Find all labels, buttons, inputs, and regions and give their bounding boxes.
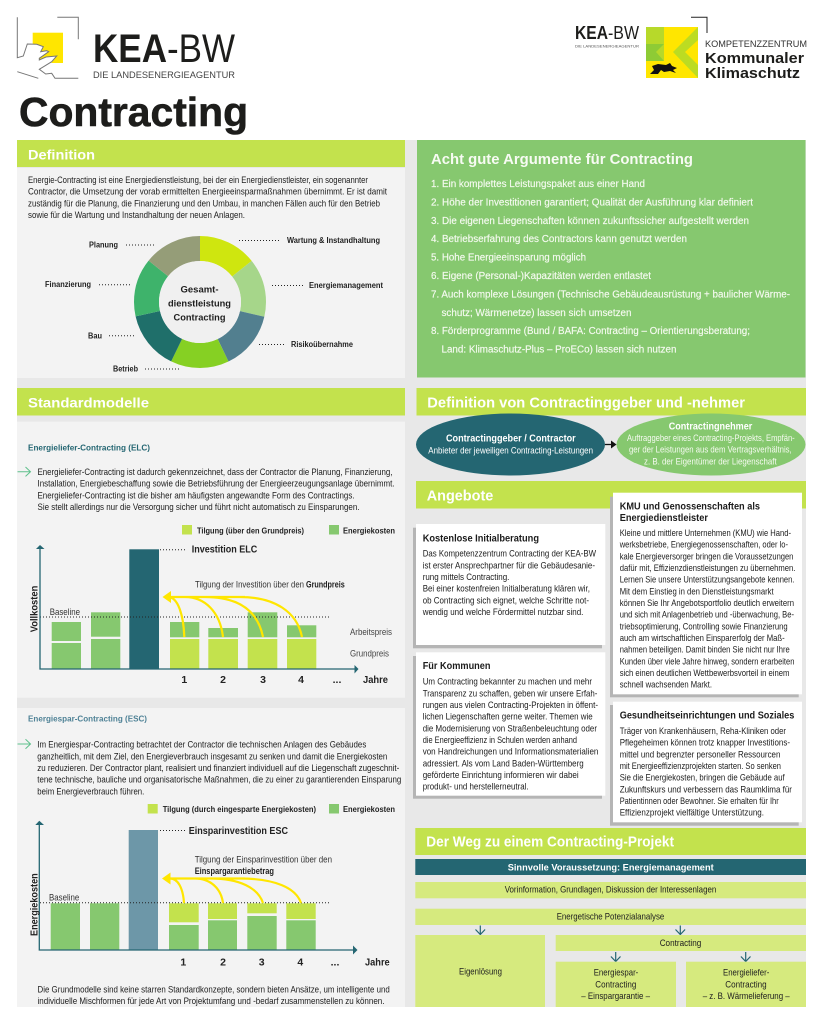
card: Gesundheitseinrichtungen und Soziales: Patientinnen oder Bewohner. Sie erhalten für Ihr: [620, 796, 779, 806]
panel: Acht gute Argumente: 1. Ein komplettes Leistungspaket aus einer Hand: [431, 179, 645, 190]
card: Für Kommunen: rungen aus vielen Contracting-Projekten in öffent-: [423, 700, 598, 710]
logo: KEA-BW: DIE LANDESENERGIEAGENTUR: [93, 70, 236, 80]
card: KMU und Genossenschaften: werksbetriebe, Energiegenossenschaften, oder lo-: [619, 540, 788, 550]
arrow: [605, 440, 616, 448]
chart: donut Gesamtdienstleistung: Wartung & Instandhaltung: [287, 235, 380, 245]
chart: ESC bars: 3: [259, 956, 265, 968]
step: Energieliefer-Contracting: Energieliefer-: [723, 968, 769, 978]
heading: Definition: Definition: [28, 146, 95, 162]
card: Gesundheitseinrichtungen und Soziales: Gesundheitseinrichtungen und Soziales: [620, 710, 795, 722]
card: KMU und Genossenschaften: dafür mit, Effizienzdienstleistungen zu übernehmen.: [620, 563, 795, 573]
heading: Definition von Contractinggeber und -nehmer: Definition von Contractinggeber und -nehmer: [427, 395, 745, 412]
card: KMU und Genossenschaften: nahmen beteiligen. Damit binden Sie nicht nur Ihre: [620, 645, 790, 655]
step: Vorinformation: Vorinformation, Grundlagen, Diskussion der Interessenlagen: [505, 885, 716, 895]
flow: Der Weg: [415, 859, 806, 1007]
card: KMU und Genossenschaften: Kleine und mittlere Unternehmen (KMU) wie Hand-: [620, 528, 791, 538]
chart: donut Gesamtdienstleistung: dienstleistung: [168, 298, 231, 310]
logo: KEA-BW: -BW: [167, 27, 235, 71]
panel: Acht gute Argumente: [417, 140, 806, 378]
card: Für Kommunen: Um Contracting bekannter zu machen und mehr: [423, 677, 592, 687]
card: KMU und Genossenschaften: Mit dem Einstieg in den Dienstleistungsmarkt: [620, 586, 774, 596]
arrows: down from Contracting: [611, 952, 750, 962]
card: Für Kommunen: produkt- und herstellerneutral.: [423, 782, 529, 792]
step: Energiespar-Contracting: Contracting: [595, 979, 636, 989]
legend: ELC: Tilgung (über den Grundpreis): [197, 526, 304, 536]
heading: Der Weg zu einem Contracting-Projekt: [415, 828, 806, 855]
text: ESC description: beim Energieverbrauch führen.: [37, 786, 144, 796]
panel: Acht gute Argumente: Land: Klimaschutz-Plus – ProECo) lassen sich nutzen: [442, 345, 676, 356]
card: KMU und Genossenschaften: schnell wachsenden Markt.: [620, 680, 712, 690]
step: Eigenlösung: [415, 935, 545, 1007]
panel: Acht gute Argumente: 4. Betriebserfahrung des Contractors kann genutzt werden: [431, 234, 687, 245]
text: ESC description: tene technische, bauliche und organisatorische Maßnahmen, die zu einer zu garantierenden Einsparung: [37, 775, 401, 785]
card: Für Kommunen: Für Kommunen: [423, 660, 490, 672]
step: Eigenlösung: Eigenlösung: [459, 966, 502, 976]
chart: donut Gesamtdienstleistung: Betrieb: [113, 364, 138, 374]
chart: ESC bars: Jahre: [365, 956, 390, 968]
step: Contracting: [556, 935, 806, 951]
arrows: down from Potenzialanalyse: [476, 926, 685, 934]
panel: Definition: [17, 140, 405, 378]
step: Sinnvolle Voraussetzung: [415, 859, 806, 875]
chart: ELC bars: Vollkosten: [28, 586, 40, 632]
text: definition paragraph: zuständig für die Planung, die Finanzierung und den Umbau, in manchen Fällen auch für den Betrieb: [28, 198, 380, 208]
card: Für Kommunen: von Handreichungen und Informationsmaterialien: [423, 747, 598, 757]
legend: ESC: Energiekosten: [343, 804, 395, 814]
step: Potenzialanalyse: [415, 909, 806, 925]
heading: Standardmodelle: [17, 388, 405, 416]
heading: Der Weg zu einem Contracting-Projekt: Der Weg zu einem Contracting-Projekt: [426, 834, 674, 851]
logo: Kompetenzzentrum Kommunaler Klimaschutz: DIE LANDESENERGIEAGENTUR: [575, 44, 639, 48]
chart: ELC bars: Grundpreis: [306, 580, 345, 590]
text: ELC description: Installation, Energiebeschaffung sowie die Betriebsführung der Energieerzeugungsanlage übernimmt.: [38, 479, 394, 489]
card: Gesundheitseinrichtungen und Soziales: [610, 702, 802, 826]
card: KMU und Genossenschaften: triebsoptimierung, Controlling sowie Finanzierung: [620, 621, 788, 631]
heading: Standardmodelle: Standardmodelle: [28, 395, 149, 411]
ellipse: Contractingnehmer: [616, 414, 806, 476]
chart: ESC bars: Tilgung der Einsparinvestition über den: [195, 854, 332, 864]
chart: ELC bars: [28, 543, 392, 686]
card: Gesundheitseinrichtungen und Soziales: mit Energieeffizienzprojekten starten. So senken: [620, 761, 781, 771]
ellipse: Contractinggeber: [416, 414, 605, 476]
ellipse: Contractingnehmer: Auftraggeber eines Contracting-Projekts, Empfän-: [627, 433, 795, 443]
chart: ESC bars: Einsparinvestition ESC: [189, 825, 288, 837]
text: ESC description: [37, 740, 401, 796]
subheading: ELC: Energieliefer-Contracting (ELC): [28, 443, 150, 453]
chart: ELC bars: Tilgung der Investition über den: [195, 580, 304, 590]
card: Gesundheitseinrichtungen und Soziales: mittel und begrenzter personeller Ressourcen: [620, 749, 780, 759]
text: ESC description: zu reduzieren. Der Contractor plant, realisiert und finanziert individuell auf die Liegenschaft zugeschnit-: [37, 763, 399, 773]
card: KMU und Genossenschaften: [610, 493, 802, 697]
chart: donut Gesamtdienstleistung: [45, 235, 383, 374]
text: definition paragraph: sowie für die Wartung und Instandhaltung der neuen Anlagen.: [28, 210, 245, 220]
panel: Acht gute Argumente: 5. Hohe Energieeinsparung möglich: [431, 253, 586, 264]
logo: KEA-BW: KEA: [93, 27, 167, 71]
card: Gesundheitseinrichtungen und Soziales: Effizienzprojekt vielfältige Unterstützung.: [620, 808, 764, 818]
logo: Kompetenzzentrum Kommunaler Klimaschutz: KEA: [575, 23, 608, 43]
card: Kostenlose Initialberatung: rung mittels Contracting.: [423, 572, 509, 582]
step: Potenzialanalyse: Energetische Potenzialanalyse: [557, 911, 664, 921]
card: Kostenlose Initialberatung: ist erster Ansprechpartner für die Gebäudesanie-: [423, 560, 595, 570]
logo: KEA-BW: [17, 17, 236, 80]
card: Kostenlose Initialberatung: Bei einer kostenfreien Initialberatung klären wir,: [423, 584, 590, 594]
chart: ESC bars: Energiekosten: [28, 873, 40, 936]
chart: donut Gesamtdienstleistung: Gesamt-: [180, 284, 218, 296]
heading: Angebote: [416, 481, 806, 508]
ellipse: Contractinggeber: Contractinggeber / Contractor: [446, 433, 576, 444]
card: Für Kommunen: die Modernisierung von Straßenbeleuchtung oder: [423, 723, 597, 733]
text: definition paragraph: Energie-Contracting ist eine Energiedienstleistung, bei der ein Energiedienstleister, ein sogenannter: [28, 175, 368, 185]
chart: donut Gesamtdienstleistung: Planung: [89, 240, 118, 250]
chart: ELC bars: Baseline: [50, 607, 80, 617]
card: Gesundheitseinrichtungen und Soziales: Zukunftskurs und verbessern das Raumklima für: [620, 784, 792, 794]
card: KMU und Genossenschaften: und sich mit Anlagenbetrieb und -überwachung, Be-: [620, 610, 794, 620]
step: Energieliefer-Contracting: [686, 962, 806, 1007]
chart: ELC bars: Investition ELC: [192, 543, 258, 555]
card: KMU und Genossenschaften: auch am wirtschaftlichen Einsparerfolg der Maß-: [620, 633, 785, 643]
icon: arrow: [18, 467, 30, 476]
chart: donut Gesamtdienstleistung: Risikoübernahme: [291, 339, 353, 349]
chart: ESC bars: Einspargarantiebetrag: [195, 866, 274, 876]
logo: Kompetenzzentrum Kommunaler Klimaschutz: -BW: [608, 23, 639, 43]
card: Für Kommunen: [413, 652, 605, 799]
step: Energiespar-Contracting: [556, 962, 676, 1007]
panel: Acht gute Argumente: 3. Die eigenen Liegenschaften können zukunftssicher aufgestellt werden: [431, 216, 749, 227]
diagram: Contractinggeber to Contractingnehmer: [416, 414, 806, 476]
text: closing note: individuelle Mischformen für jede Art von Projektumfang und -bedarf zusammenstellen zu können.: [38, 996, 384, 1006]
heading: Definition von Contractinggeber und -nehmer: [416, 388, 806, 416]
card: Kostenlose Initialberatung: Das Kompetenzzentrum Contracting der KEA-BW: [423, 549, 596, 559]
heading: Definition: [17, 140, 405, 167]
chart: ELC bars: 1: [181, 674, 187, 686]
card: Kostenlose Initialberatung: ob Contracting sich eignet, welche Schritte not-: [423, 595, 589, 605]
chart: donut Gesamtdienstleistung: Bau: [88, 330, 102, 340]
text: ESC description: ganzheitlich, mit dem Ziel, den Energieverbrauch insgesamt zu senken und damit die Energiekosten: [37, 751, 387, 761]
chart: ELC bars: 4: [298, 674, 304, 686]
legend: ELC: Energiekosten: [343, 526, 395, 536]
card: KMU und Genossenschaften: KMU und Genossenschaften als: [620, 501, 760, 513]
text: definition paragraph: Contractor, die Umsetzung der vorab ermittelten Energieeinsparmaßnahmen übernimmt. Er ist damit: [28, 187, 387, 197]
text: ESC description: Im Energiespar-Contracting betrachtet der Contractor die technischen Anlagen des Gebäudes: [37, 740, 367, 750]
step: Energieliefer-Contracting: Contracting: [725, 979, 767, 989]
logo: Kompetenzzentrum Kommunaler Klimaschutz: Kommunaler: [705, 50, 804, 67]
step: Contracting: Contracting: [660, 938, 701, 948]
text: closing note: [38, 984, 390, 1006]
card: Kostenlose Initialberatung: wendig und welche Fördermittel nutzbar sind.: [422, 607, 583, 617]
step: Energiespar-Contracting: – Einspargarantie –: [581, 991, 651, 1001]
panel: Acht gute Argumente: 6. Eigene (Personal-)Kapazitäten werden entlastet: [431, 271, 651, 282]
text: ELC description: Energieliefer-Contracting ist die bisher am häufigsten angewandte Form des Contractings.: [38, 490, 354, 500]
logo: Kompetenzzentrum Kommunaler Klimaschutz: KOMPETENZZENTRUM: [705, 39, 807, 50]
panel: Acht gute Argumente: 7. Auch komplexe Lösungen (Technische Gebäudeausrüstung + baulicher Wärme-: [431, 289, 790, 300]
heading: Angebote: Angebote: [427, 488, 493, 505]
legend: ELC: [182, 525, 395, 536]
chart: ELC bars: Grundpreis: [350, 649, 389, 659]
chart: ELC bars: Arbeitspreis: [350, 627, 392, 637]
step: Vorinformation: [415, 882, 806, 898]
panel: Acht gute Argumente: 2. Höhe der Investitionen garantiert; Qualität der Ausführung klar definiert: [431, 197, 753, 208]
panel: Energieliefer-Contracting: [17, 422, 405, 698]
ellipse: Contractingnehmer: z. B. der Eigentümer der Liegenschaft: [644, 456, 777, 466]
card: Kostenlose Initialberatung: [413, 524, 605, 648]
card: KMU und Genossenschaften: Energiedienstleister: [620, 512, 708, 524]
card: Für Kommunen: lichen Liegenschaften gerne weiter. Themen wie: [423, 712, 593, 722]
card: Kostenlose Initialberatung: Kostenlose Initialberatung: [423, 532, 539, 544]
logo: Kompetenzzentrum Kommunaler Klimaschutz: Klimaschutz: [705, 65, 800, 82]
chart: ELC bars: ...: [333, 674, 341, 686]
chart: ELC bars: Jahre: [363, 674, 388, 686]
chart: ESC bars: Baseline: [49, 893, 79, 903]
step: Energiespar-Contracting: Energiespar-: [594, 968, 638, 978]
ellipse: Contractingnehmer: Contractingnehmer: [669, 421, 752, 432]
chart: ESC bars: ...: [331, 956, 339, 968]
card: Gesundheitseinrichtungen und Soziales: Träger von Krankenhäusern, Reha-Kliniken oder: [620, 726, 786, 736]
panel: Acht gute Argumente: 8. Förderprogramme (Bund / BAFA: Contracting – Orientierungsberatung;: [431, 326, 750, 337]
card: Gesundheitseinrichtungen und Soziales: Sie die Energiekosten, bringen die Gebäude auf: [620, 773, 785, 783]
card: KMU und Genossenschaften: können Sie Ihr Angebotsportfolio deutlich erweitern: [620, 598, 794, 608]
step: Sinnvolle Voraussetzung: Sinnvolle Voraussetzung: Energiemanagement: [508, 863, 715, 874]
step: Energieliefer-Contracting: – z. B. Wärmelieferung –: [703, 991, 791, 1001]
card: KMU und Genossenschaften: kale Energieversorger bringen die Voraussetzungen: [620, 551, 793, 561]
panel: Energiespar-Contracting: [17, 708, 405, 1007]
chart: ELC bars: 3: [260, 674, 266, 686]
ellipse: Contractinggeber: Anbieter der jeweiligen Contracting-Leistungen: [428, 445, 593, 455]
chart: ESC bars: [28, 821, 390, 968]
chart: ESC bars: 4: [297, 956, 303, 968]
text: ELC description: Sie stellt allerdings nur die Versorgung sicher und führt nicht automatisch zu Einsparungen.: [38, 502, 360, 512]
chart: ESC bars: 1: [180, 956, 186, 968]
panel: Acht gute Argumente: schutz; Wärmenetze) lassen sich umsetzen: [442, 308, 632, 319]
legend: ESC: Tilgung (durch eingesparte Energiekosten): [163, 804, 316, 814]
chart: ESC bars: 2: [220, 956, 226, 968]
chart: ELC bars: 2: [220, 674, 226, 686]
text: ELC description: Energieliefer-Contracting ist dadurch gekennzeichnet, dass der Contractor die Planung, Finanzierung,: [38, 467, 392, 477]
card: Für Kommunen: die Energieeffizienz in Schulen werden anhand: [423, 735, 577, 745]
chart: donut Gesamtdienstleistung: Contracting: [174, 313, 226, 324]
card: Für Kommunen: geförderte Einrichtung informieren wir dabei: [423, 770, 579, 780]
text: ELC description: [38, 467, 394, 512]
logo: Kompetenzzentrum Kommunaler Klimaschutz: [575, 17, 807, 82]
title: Contracting: [19, 89, 248, 135]
chart: donut Gesamtdienstleistung: Finanzierung: [45, 279, 91, 289]
panel: Acht gute Argumente: Acht gute Argumente für Contracting: [431, 151, 693, 168]
card: KMU und Genossenschaften: sich einen deutlichen Wettbewerbsvorteil in einem: [620, 668, 789, 678]
subheading: ESC: Energiespar-Contracting (ESC): [28, 713, 147, 723]
icon: arrow: [18, 739, 30, 749]
card: Für Kommunen: adressiert. Als vom Land Baden-Württemberg: [423, 758, 584, 768]
text: definition paragraph: [28, 175, 387, 220]
card: Für Kommunen: Transparenz zu schaffen, geben wir unsere Erfah-: [423, 688, 597, 698]
text: closing note: Die Grundmodelle sind keine starren Standardkonzepte, sondern bieten Ansätze, um intelligente und: [38, 984, 390, 994]
card: Gesundheitseinrichtungen und Soziales: Pflegeheimen können trotz knapper Investitions-: [620, 738, 790, 748]
ellipse: Contractingnehmer: ger der Leistungen aus dem Vertragsverhältnis,: [629, 445, 792, 455]
chart: donut Gesamtdienstleistung: Energiemanagement: [309, 280, 383, 290]
